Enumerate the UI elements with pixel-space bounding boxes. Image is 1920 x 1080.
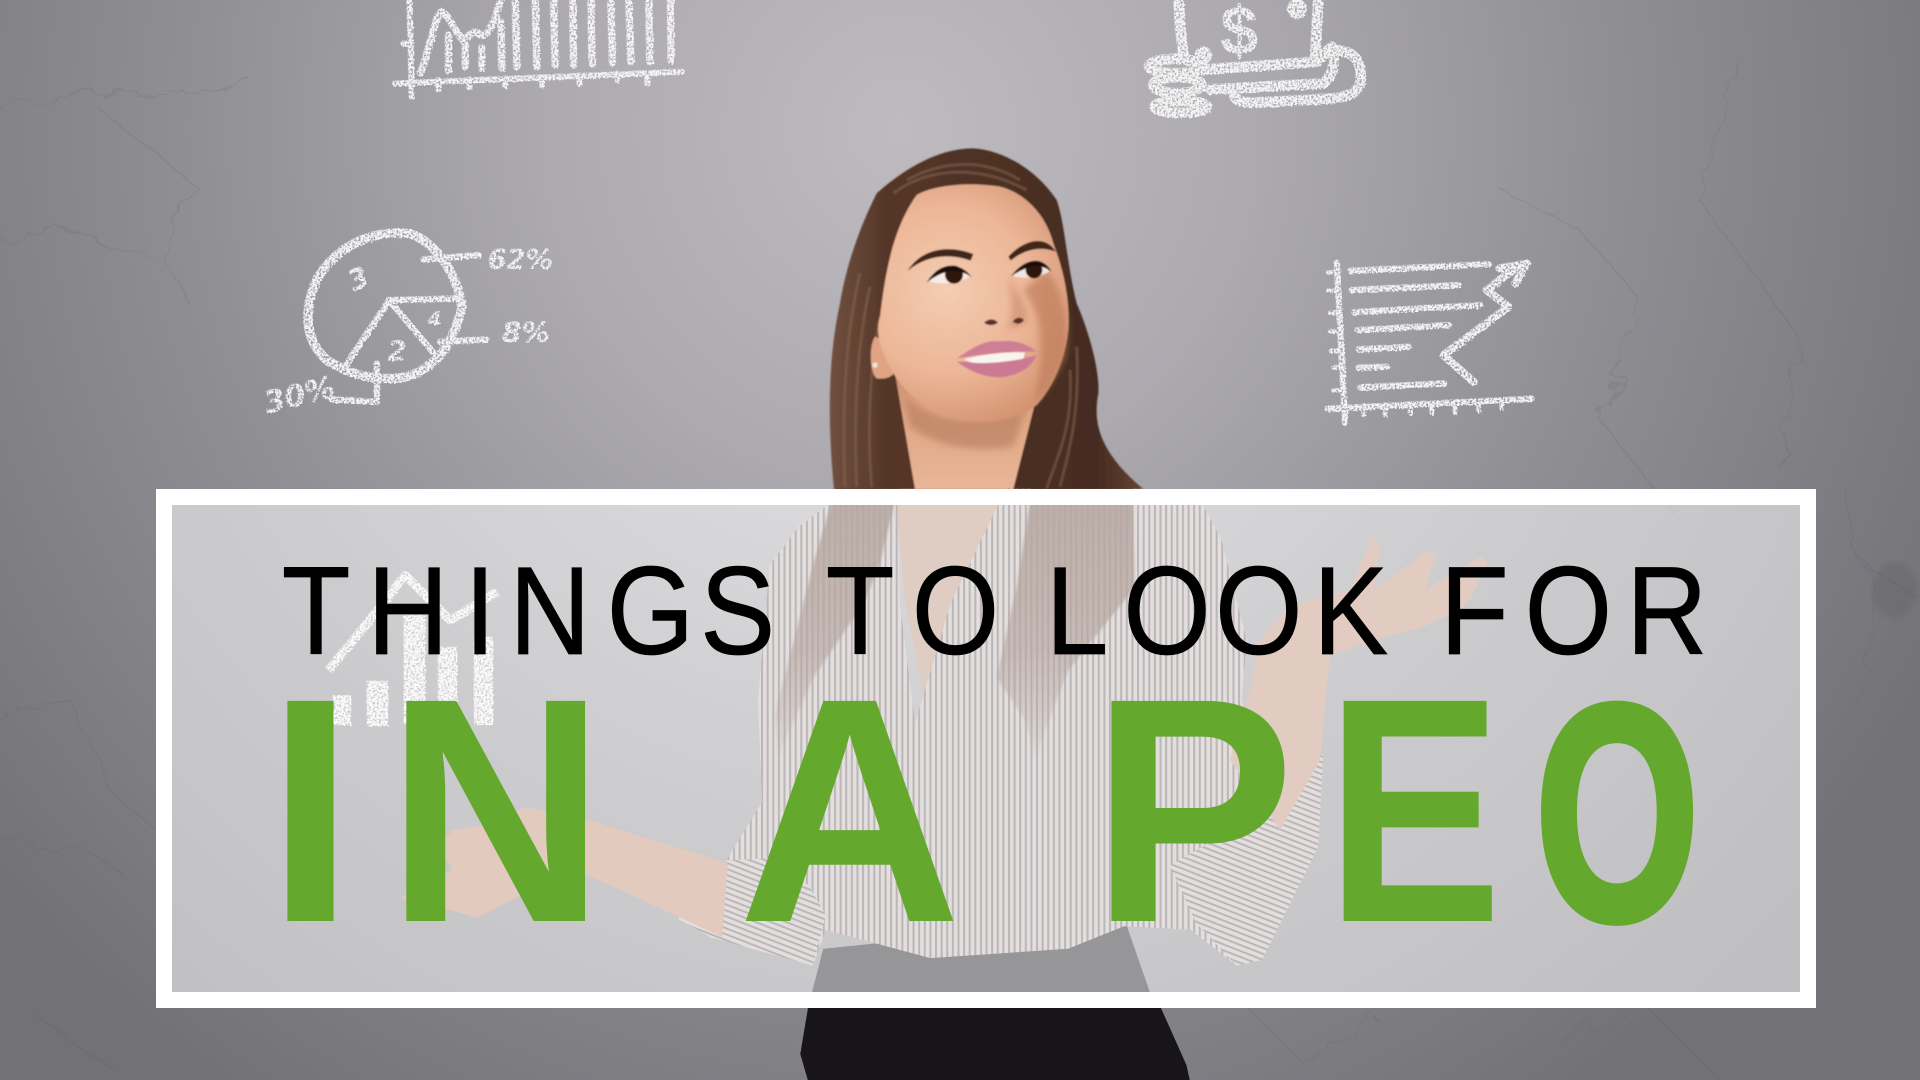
shirt <box>678 486 1323 966</box>
pie labels: 62% <box>487 244 553 275</box>
neck <box>895 373 1037 489</box>
hair falling over shirt <box>775 486 899 757</box>
title line: in a PEO: E <box>1326 632 1502 990</box>
eyes <box>928 268 970 283</box>
right arm and hand <box>1230 539 1488 830</box>
pie labels: 3 <box>342 260 374 298</box>
left arm and hand <box>400 807 728 937</box>
right cuff <box>1170 753 1323 966</box>
chalk icon: list chart with rising arrow <box>1327 263 1532 423</box>
title line: things to look for: THINGS TO LOOK FOR <box>282 542 1708 681</box>
title line: in a PEO: N <box>386 632 606 990</box>
neck and chest skin <box>895 482 1007 701</box>
eyebrows <box>908 249 973 271</box>
pie labels <box>260 244 553 421</box>
hair highlights <box>844 164 1077 488</box>
head and hair <box>830 148 1143 489</box>
woman lower body: arms, shirt and skirt <box>678 482 1323 1080</box>
chalk icon: money and coins <box>1149 0 1361 113</box>
title line: in a PEO: O <box>1535 640 1699 984</box>
chalk icon: pie chart with percentages <box>260 233 553 421</box>
title panel with white frame <box>164 497 1808 1000</box>
nose <box>984 319 998 325</box>
title line: in a PEO: A <box>738 631 961 989</box>
teeth <box>964 352 1025 363</box>
pie labels: 30% <box>260 370 338 421</box>
chalk icon: rising bars behind the panel <box>328 575 497 726</box>
ear <box>871 337 895 379</box>
cheek shading <box>1023 270 1067 403</box>
shirt sleeve cuffs <box>678 858 826 966</box>
face <box>878 184 1069 421</box>
woman figure <box>400 148 1488 1080</box>
hair <box>830 148 1143 489</box>
pie labels: 8% <box>502 317 550 350</box>
neck shadow <box>903 397 1027 449</box>
earring <box>872 362 878 368</box>
nose shadow <box>1007 277 1027 330</box>
chalk icon: line and bar chart <box>395 0 682 97</box>
mouth <box>957 341 1037 359</box>
skirt <box>800 919 1191 1080</box>
title line: in a PEO: I <box>266 631 355 989</box>
title line: in a PEO <box>266 631 1699 990</box>
pie labels: 4 <box>426 307 441 331</box>
pie labels: 2 <box>387 336 406 367</box>
title line: in a PEO: P <box>1091 633 1295 990</box>
